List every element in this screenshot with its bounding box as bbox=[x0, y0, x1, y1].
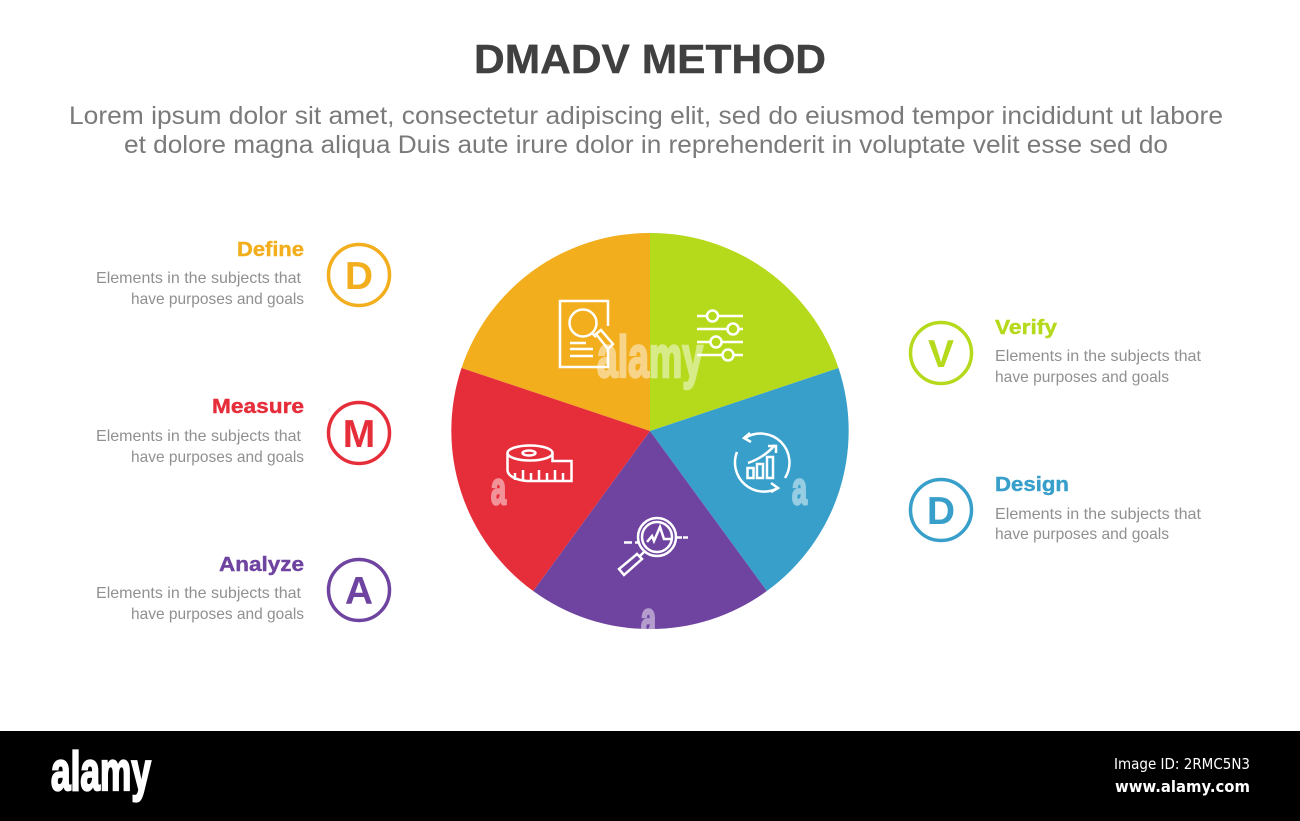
description: analyze: Elements in the subjects that bbox=[96, 585, 302, 602]
watermark: alamy over pie: alamy bbox=[597, 325, 703, 390]
badge: M bbox=[328, 402, 390, 464]
description: verify: have purposes and goals bbox=[995, 369, 1169, 386]
watermark: alamy over pie: a bbox=[641, 593, 657, 644]
heading: analyze: Analyze bbox=[219, 554, 304, 576]
description: define: Elements in the subjects that bbox=[96, 270, 302, 287]
pie chart bbox=[451, 233, 849, 629]
heading: measure: Measure bbox=[212, 396, 304, 418]
heading: design: Design bbox=[995, 474, 1069, 496]
subtitle text bbox=[69, 102, 1223, 159]
item: analyze bbox=[96, 554, 390, 623]
badge: D bbox=[328, 244, 390, 306]
description: design: Elements in the subjects that bbox=[995, 506, 1202, 523]
segment: verify bbox=[650, 233, 838, 431]
description: define: have purposes and goals bbox=[131, 291, 304, 308]
description: measure: have purposes and goals bbox=[131, 449, 304, 466]
item: define bbox=[96, 239, 390, 308]
description: verify bbox=[995, 348, 1202, 386]
heading: verify: Verify bbox=[995, 317, 1058, 339]
description: design: have purposes and goals bbox=[995, 526, 1169, 543]
segment: measure bbox=[451, 368, 650, 591]
description: measure: Elements in the subjects that bbox=[96, 428, 302, 445]
icon: growth chart in cycle arrows bbox=[735, 433, 789, 492]
watermark: alamy over pie bbox=[491, 325, 808, 644]
subtitle text: Lorem ipsum dolor sit amet, consectetur adipiscing elit, sed do eiusmod tempor incididunt ut labore bbox=[69, 102, 1223, 130]
description: analyze: have purposes and goals bbox=[131, 606, 304, 623]
footer bar bbox=[0, 731, 1300, 821]
footer logo: alamy bbox=[51, 740, 151, 802]
badge: A: A bbox=[345, 570, 373, 613]
description: design bbox=[995, 506, 1202, 543]
badge: V bbox=[910, 322, 972, 384]
description: analyze bbox=[96, 585, 304, 623]
item: design bbox=[910, 474, 1202, 543]
website: www.alamy.com bbox=[1115, 777, 1250, 796]
image id: Image ID: 2RMC5N3 bbox=[1114, 755, 1250, 773]
heading: define: Define bbox=[237, 239, 304, 261]
badge: D: D bbox=[345, 255, 373, 298]
description: verify: Elements in the subjects that bbox=[995, 348, 1202, 365]
segment: analyze bbox=[533, 431, 767, 629]
icon: document with magnifier bbox=[560, 301, 613, 367]
segment: define bbox=[462, 233, 650, 431]
watermark: alamy over pie: a bbox=[491, 463, 507, 514]
item: measure bbox=[96, 396, 390, 466]
item: verify bbox=[910, 317, 1202, 386]
badge: D bbox=[910, 480, 972, 540]
description: measure bbox=[96, 428, 304, 466]
icon: sliders bbox=[697, 310, 743, 360]
description: define bbox=[96, 270, 304, 308]
badge: D: D bbox=[927, 490, 955, 533]
watermark: alamy over pie: a bbox=[792, 463, 808, 514]
title: DMADV METHOD bbox=[474, 36, 826, 82]
icon: magnifier with pulse line bbox=[619, 518, 688, 575]
badge: V: V bbox=[928, 333, 954, 376]
subtitle text: et dolore magna aliqua Duis aute irure dolor in reprehenderit in voluptate velit esse sed do bbox=[124, 131, 1168, 159]
segment: design bbox=[650, 368, 849, 591]
badge: M: M bbox=[343, 413, 375, 456]
badge: A bbox=[328, 560, 390, 620]
icon: measuring tape bbox=[508, 446, 572, 481]
